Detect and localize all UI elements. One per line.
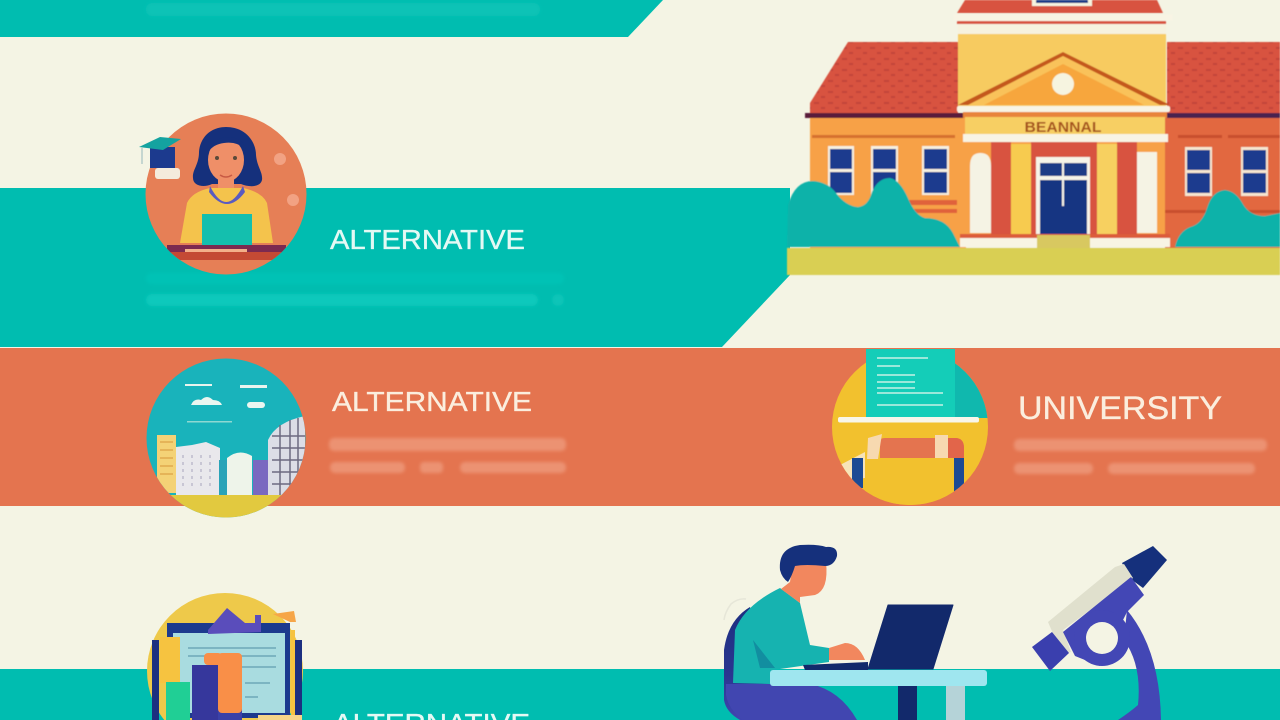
laptop screen <box>167 623 290 718</box>
icon: study desk circle <box>832 345 995 508</box>
chair back <box>724 607 770 720</box>
roof: left wing <box>810 42 958 113</box>
hand <box>829 643 865 660</box>
left wing wall <box>805 113 966 248</box>
steps <box>960 234 1170 248</box>
legs <box>726 684 857 720</box>
bush: right <box>1175 190 1280 247</box>
panel: top teal band <box>0 0 663 37</box>
tube highlight <box>1048 564 1133 654</box>
head and neck <box>781 562 827 603</box>
portico frieze with name: BEANNAL <box>1024 119 1102 136</box>
icon: books and laptop circle <box>147 593 303 720</box>
heading: university: UNIVERSITY <box>1018 390 1222 426</box>
panel: teal alternative band <box>0 188 790 347</box>
panel: bottom teal band <box>0 669 1280 720</box>
paper sheet <box>866 349 955 418</box>
arm <box>1118 610 1161 720</box>
lens <box>1032 632 1069 671</box>
icon: student with laptop circle <box>139 114 306 274</box>
laptop <box>803 605 953 670</box>
pediment <box>957 52 1170 112</box>
table <box>770 670 987 720</box>
portico frieze with name <box>963 112 1168 142</box>
roof: right wing <box>1167 42 1280 113</box>
torso <box>733 588 829 684</box>
heading: alternative on orange: ALTERNATIVE <box>332 386 532 417</box>
portico columns <box>965 142 1165 237</box>
windows: left <box>828 146 949 195</box>
door <box>1036 157 1090 236</box>
bush: left <box>787 178 960 247</box>
text block: university placeholder lines <box>1014 439 1267 474</box>
panel: orange band <box>0 348 1280 506</box>
stacked books <box>160 637 242 720</box>
hands <box>867 434 948 459</box>
windows: right <box>1185 147 1268 196</box>
eyepiece <box>1122 546 1167 588</box>
body <box>1063 577 1144 666</box>
icon: city skyline circle <box>140 358 310 520</box>
tower wall <box>958 34 1166 108</box>
icon: microscope <box>1032 546 1167 720</box>
text block: alternative placeholder lines <box>329 438 566 473</box>
roof: tower <box>953 0 1173 34</box>
icon: person at laptop <box>724 545 987 720</box>
ground <box>787 248 1280 275</box>
hair <box>780 545 837 582</box>
icon: school building <box>787 0 1280 275</box>
ring <box>1074 610 1130 666</box>
house tab <box>208 608 261 634</box>
right wing wall <box>1165 113 1280 248</box>
icon: graduation cap <box>139 137 181 179</box>
heading: alternative on teal: ALTERNATIVE <box>330 224 525 255</box>
